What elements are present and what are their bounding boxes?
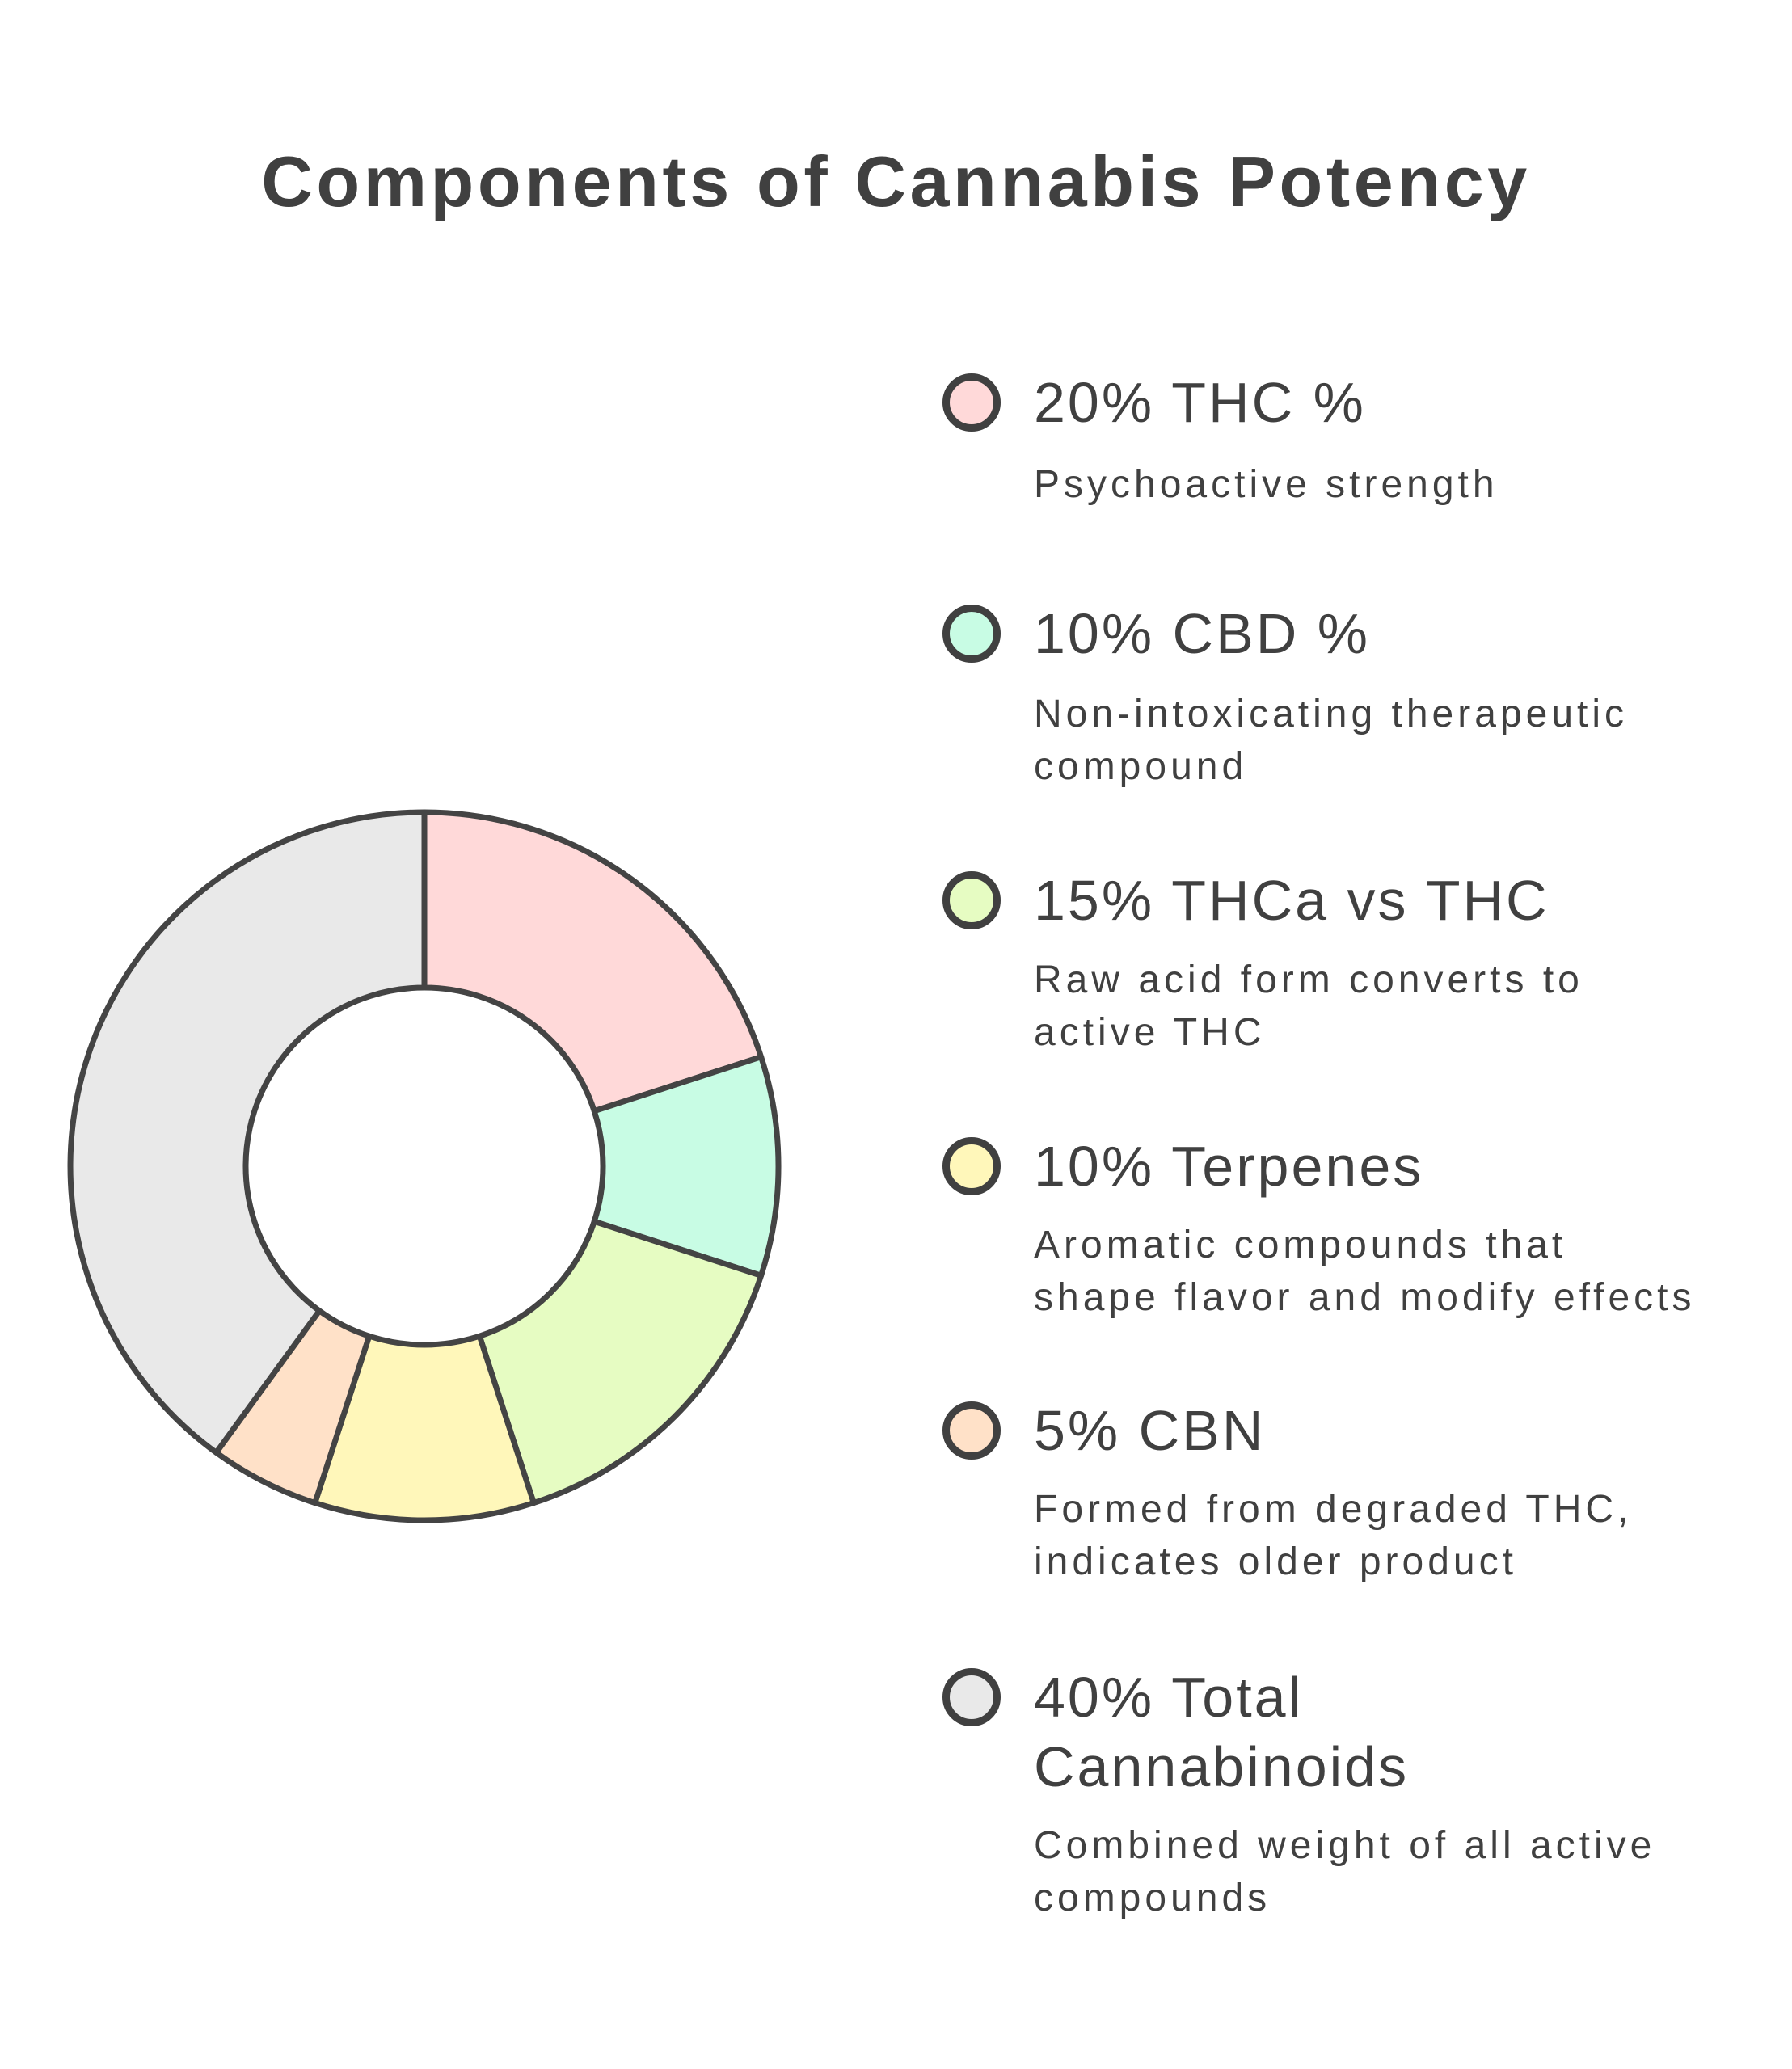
donut chart [68,810,781,1523]
heading [1034,1666,1409,1798]
description [1034,1824,1655,1919]
icon: peach dot [942,1401,1001,1460]
heading: 20% THC % [1034,371,1366,434]
title: Components of Cannabis Potency [261,141,1531,221]
legend item: Total Cannabinoids [942,1666,1655,1919]
icon: gray dot [942,1668,1001,1726]
segment: CBN [217,1311,369,1503]
description: Aromatic compounds that [1034,1224,1566,1266]
segment: Total Cannabinoids [70,812,424,1452]
description: Combined weight of all active [1034,1824,1655,1867]
legend item: CBD [942,602,1628,788]
description: Psychoactive strength [1034,463,1499,506]
heading: 40% Total [1034,1666,1303,1729]
description [1034,1488,1632,1583]
description: shape flavor and modify effects [1034,1276,1696,1319]
legend item: THC [942,371,1499,506]
description: active THC [1034,1011,1266,1054]
heading: 10% Terpenes [1034,1135,1423,1198]
description [1034,959,1583,1054]
description [1034,1224,1696,1319]
legend item: CBN [942,1399,1632,1583]
description: Non-intoxicating therapeutic [1034,693,1628,735]
description: compound [1034,745,1247,788]
legend item: Terpenes [942,1135,1696,1319]
heading: 10% CBD % [1034,602,1370,665]
description: compounds [1034,1877,1271,1919]
description: indicates older product [1034,1540,1517,1583]
icon: pink dot [942,373,1001,432]
heading: Cannabinoids [1034,1735,1409,1798]
icon: lime dot [942,871,1001,929]
segment: THCa [479,1221,761,1503]
segment: THC [424,812,761,1111]
segment: CBD [594,1057,778,1275]
legend item: THCa [942,869,1583,1054]
description: Formed from degraded THC, [1034,1488,1632,1531]
segment: Terpenes [315,1336,533,1520]
description [1034,693,1628,788]
heading: 15% THCa vs THC [1034,869,1550,932]
description: Raw acid form converts to [1034,959,1583,1001]
icon: mint dot [942,605,1001,663]
heading: 5% CBN [1034,1399,1265,1462]
icon: yellow dot [942,1137,1001,1195]
